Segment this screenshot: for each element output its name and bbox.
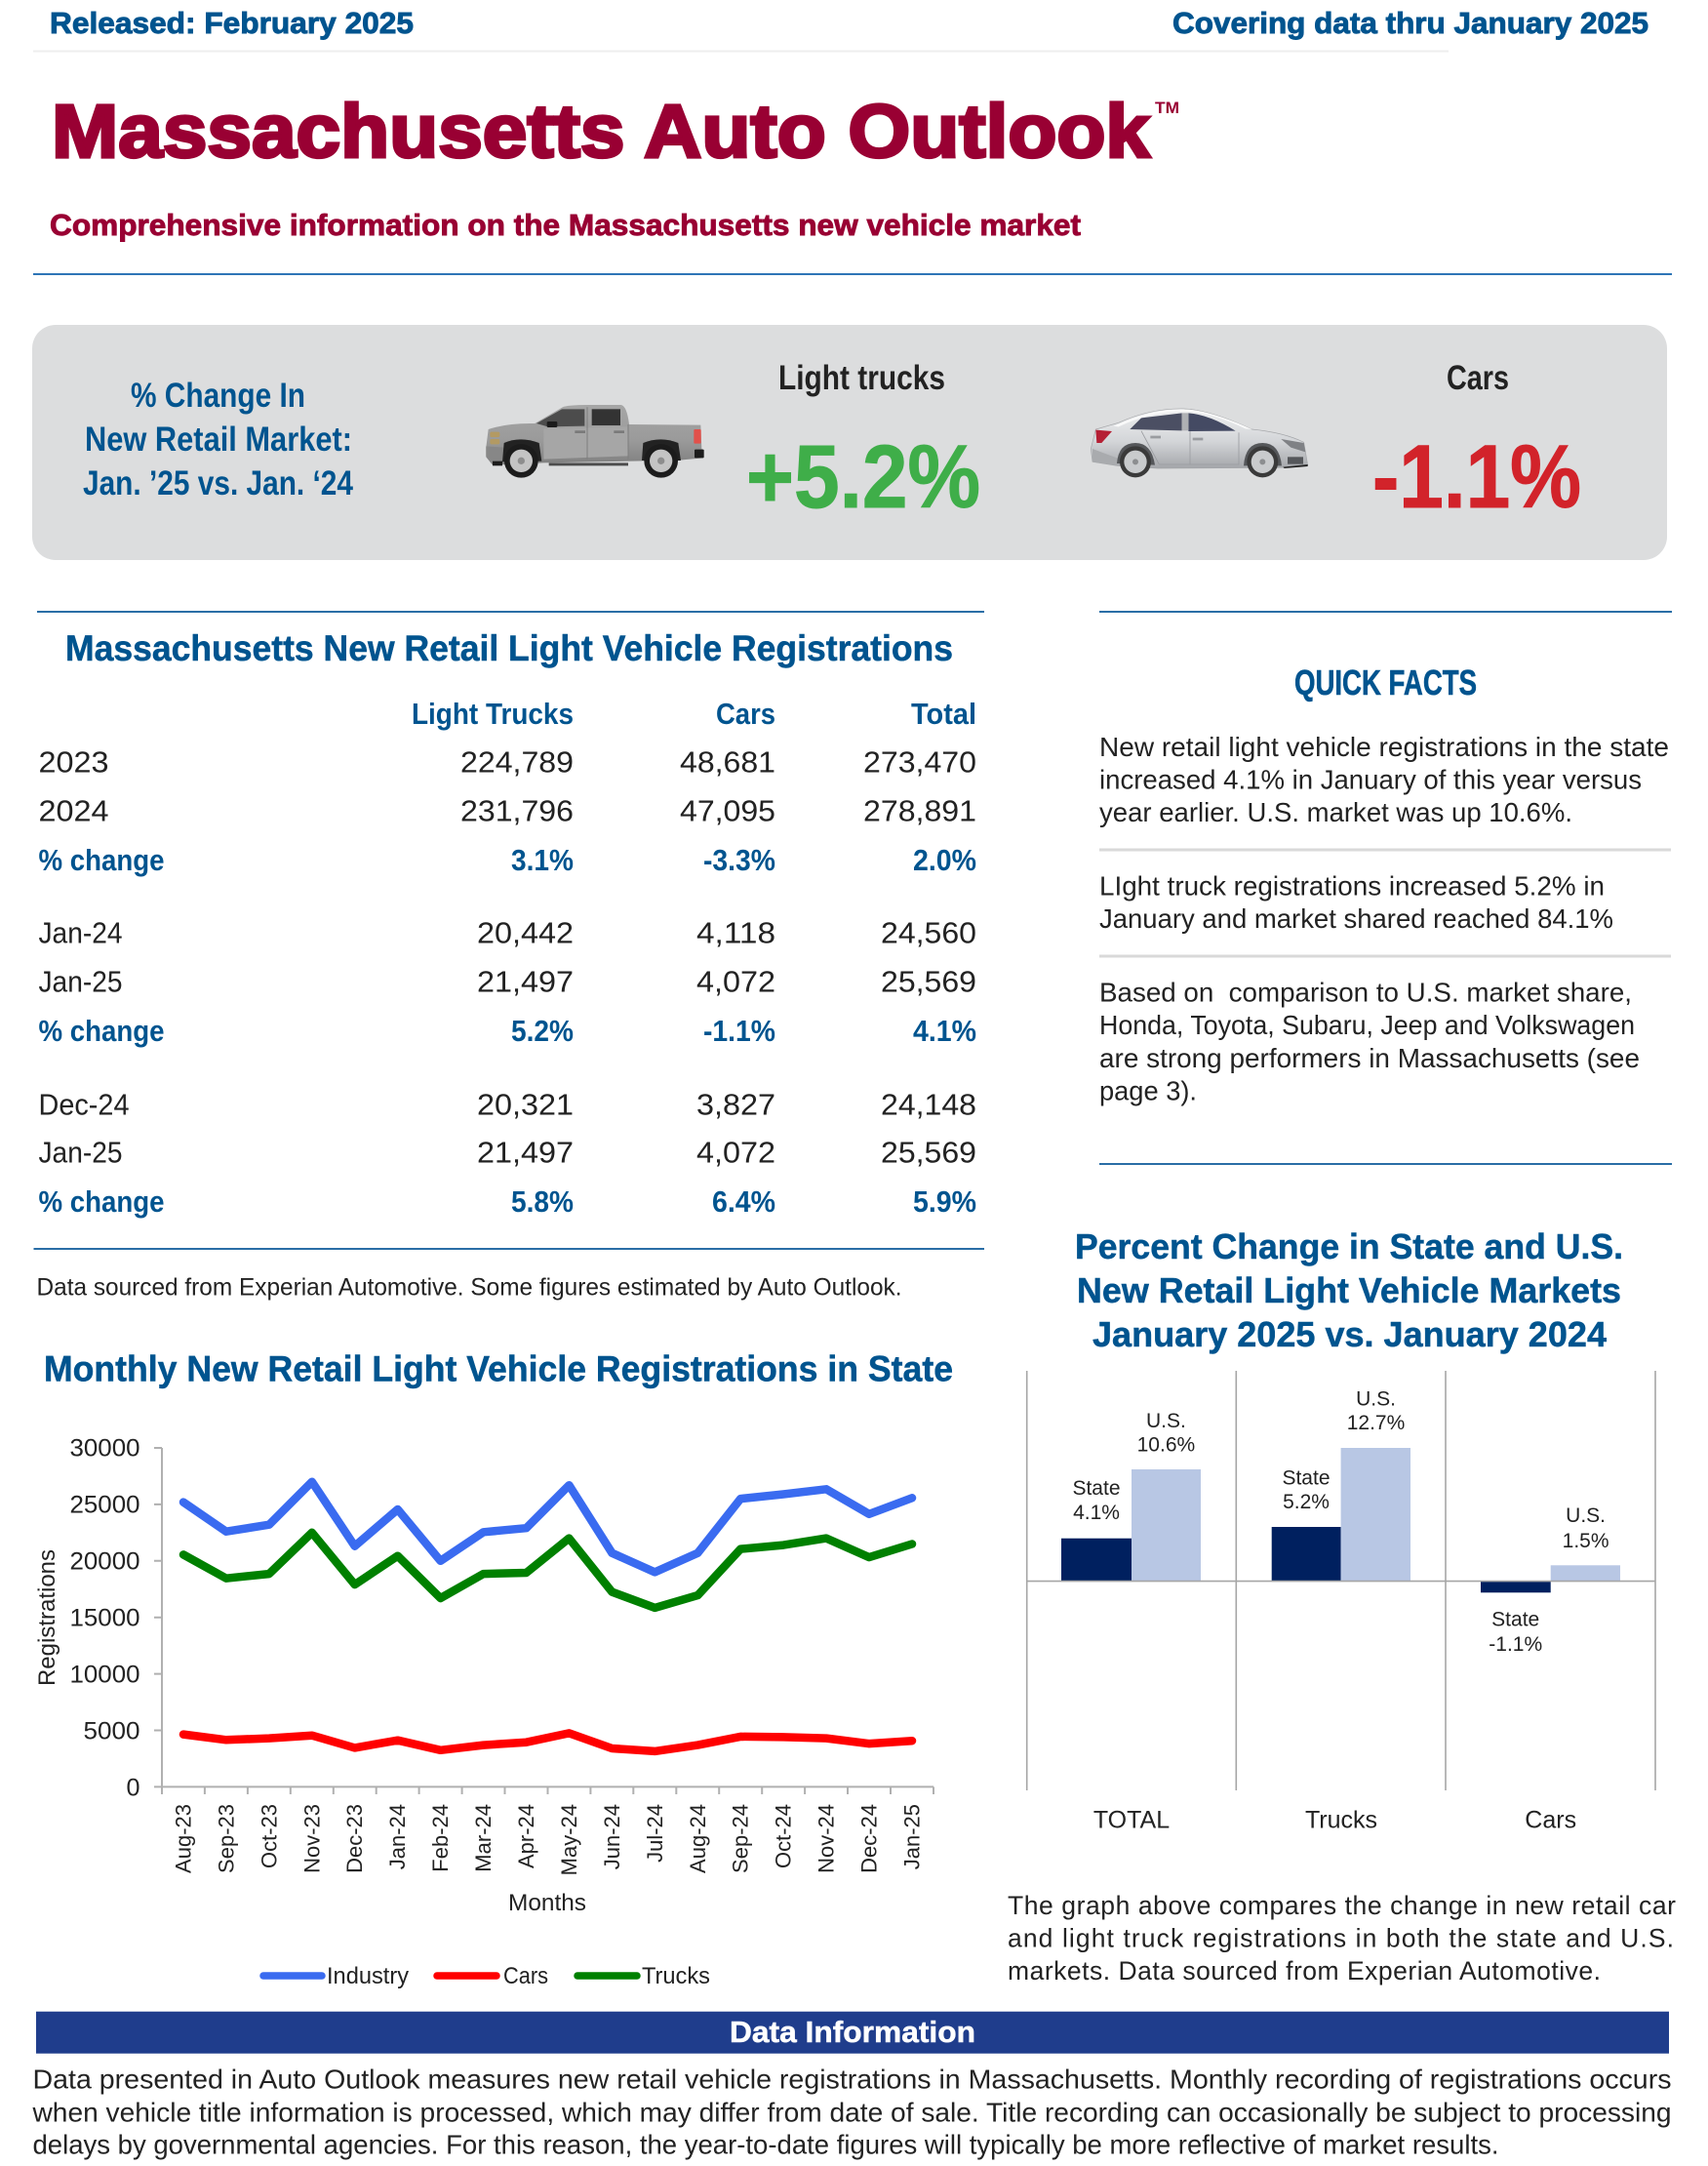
labels: cars: U.S. <box>1566 1504 1606 1527</box>
fact 3: Honda, Toyota, Subaru, Jeep and Volkswagen <box>1099 1010 1635 1040</box>
row: percent change annual: % change <box>39 843 164 877</box>
row: 2023: 273,470 <box>863 745 976 779</box>
bar chart description: The graph above compares the change in new retail car <box>1008 1891 1676 1920</box>
row: Jan-25: Jan-25 <box>39 964 123 999</box>
data information text: Data presented in Auto Outlook measures new retail vehicle registrations in Massachusetts. Monthly recording of registrations occurs <box>33 2065 1672 2095</box>
line chart: monthly registrations <box>34 1434 933 1989</box>
icon: pickup truck <box>486 405 704 478</box>
table title: Massachusetts New Retail Light Vehicle Registrations <box>65 628 953 668</box>
row: percent change January: 4.1% <box>913 1014 976 1048</box>
panel heading <box>83 377 353 502</box>
labels: total: U.S. <box>1146 1410 1186 1432</box>
panel heading: % Change In <box>131 377 305 415</box>
panel: percent change summary <box>32 325 1667 560</box>
fact 3: Based on comparison to U.S. market share, <box>1099 978 1632 1007</box>
bar chart heading <box>1075 1226 1623 1354</box>
data information text: delays by governmental agencies. For this reason, the year-to-date figures will typically be more reflective of market results. <box>33 2130 1498 2160</box>
row: percent change January <box>39 1014 976 1048</box>
row: percent change monthly <box>39 1184 976 1219</box>
row: Dec-24: 20,321 <box>477 1087 574 1122</box>
row: 2024: 278,891 <box>863 794 976 827</box>
quick facts heading: QUICK FACTS <box>1294 662 1477 702</box>
data information text <box>31 2065 1671 2160</box>
light trucks stat: +5.2% <box>746 427 980 527</box>
bars: cars <box>1481 1565 1620 1592</box>
line chart heading: Monthly New Retail Light Vehicle Registrations in State <box>44 1348 953 1389</box>
row: 2024: 47,095 <box>680 794 775 827</box>
x axis month labels: Jan-24 <box>385 1804 410 1869</box>
labels: cars: 1.5% <box>1563 1530 1609 1552</box>
x axis month labels: Nov-24 <box>814 1804 839 1873</box>
bar chart description <box>1008 1891 1676 1986</box>
data information text: when vehicle title information is processed, which may differ from date of sale. Title recording can occasionally be subject to processing <box>31 2097 1671 2127</box>
x axis month labels: Oct-23 <box>257 1804 281 1868</box>
labels: cars <box>1489 1504 1609 1656</box>
subtitle: Comprehensive information on the Massachusetts new vehicle market <box>50 208 1081 242</box>
y axis labels: 30000 <box>70 1434 140 1462</box>
labels: cars: -1.1% <box>1489 1633 1542 1656</box>
row: Jan-24: Jan-24 <box>39 915 123 950</box>
header: release date and coverage: Covering data thru January 2025 <box>1172 6 1648 40</box>
column headers: Total <box>911 697 976 731</box>
y axis labels: 20000 <box>70 1547 140 1575</box>
row: percent change annual: 2.0% <box>913 843 976 877</box>
x axis month labels: Jan-25 <box>899 1804 925 1869</box>
row: Dec-24: Dec-24 <box>39 1087 129 1122</box>
x axis month labels: Nov-23 <box>299 1804 324 1873</box>
header: release date and coverage: Released: February 2025 <box>50 6 414 40</box>
icon: sedan car <box>1091 409 1308 477</box>
fact 1: year earlier. U.S. market was up 10.6%. <box>1099 797 1572 827</box>
series: industry <box>183 1482 912 1572</box>
x axis month labels: May-24 <box>557 1804 581 1875</box>
row: percent change January: % change <box>39 1014 164 1048</box>
title: TM <box>1155 99 1179 117</box>
x axis month labels: Feb-24 <box>428 1804 453 1872</box>
y axis title: Registrations <box>34 1549 60 1686</box>
row: Jan-24: 4,118 <box>696 915 775 950</box>
row: percent change annual <box>39 843 976 877</box>
row: Jan-25 second: 4,072 <box>696 1136 775 1169</box>
y axis labels: 25000 <box>70 1491 140 1518</box>
column headers: Light Trucks <box>412 697 574 731</box>
row: Jan-24: 24,560 <box>881 915 976 950</box>
category labels <box>1093 1807 1576 1834</box>
row: percent change monthly: 5.8% <box>511 1184 574 1219</box>
row: percent change monthly: 5.9% <box>913 1184 976 1219</box>
chart grid <box>1027 1371 1655 1790</box>
fact 1 <box>1099 732 1669 827</box>
row: Jan-25: 21,497 <box>477 964 574 999</box>
labels: trucks: 12.7% <box>1347 1412 1405 1434</box>
labels: total: 4.1% <box>1073 1502 1120 1524</box>
panel: quick facts <box>1099 611 1672 1165</box>
y axis labels: 10000 <box>70 1661 140 1688</box>
bar chart description: and light truck registrations in both the state and U.S. <box>1008 1924 1674 1953</box>
y axis labels <box>70 1434 140 1801</box>
row: percent change January: 5.2% <box>511 1014 574 1048</box>
row: 2024: 2024 <box>39 794 109 827</box>
chart legend: Industry <box>327 1963 409 1989</box>
cars stat: Cars <box>1447 359 1509 397</box>
labels: trucks: U.S. <box>1356 1387 1396 1411</box>
bars: trucks <box>1272 1448 1410 1582</box>
bar chart heading: January 2025 vs. January 2024 <box>1092 1314 1607 1354</box>
x axis month labels: Sep-24 <box>729 1804 753 1873</box>
row: Jan-25 second: Jan-25 <box>39 1136 123 1169</box>
row: Jan-25 second: 21,497 <box>477 1136 574 1169</box>
chart legend <box>263 1963 710 1989</box>
category labels: Cars <box>1525 1807 1576 1834</box>
row: percent change annual: -3.3% <box>703 843 775 877</box>
series: trucks <box>183 1533 912 1608</box>
row: percent change annual: 3.1% <box>511 843 574 877</box>
row: percent change monthly: 6.4% <box>712 1184 775 1219</box>
row: Dec-24: 24,148 <box>881 1087 976 1122</box>
x axis month labels: Sep-23 <box>214 1804 238 1873</box>
row: Jan-25: 25,569 <box>881 964 976 999</box>
x axis month labels: Dec-24 <box>856 1804 882 1873</box>
panel heading: New Retail Market: <box>85 421 352 459</box>
labels: total: 10.6% <box>1137 1434 1195 1456</box>
fact 2: January and market shared reached 84.1% <box>1099 903 1613 934</box>
data information banner: Data Information <box>730 2015 975 2049</box>
row: Jan-25 second: 25,569 <box>881 1136 976 1169</box>
row: Jan-24: 20,442 <box>477 915 574 950</box>
x axis month labels: Jun-24 <box>600 1804 624 1869</box>
labels: trucks: 5.2% <box>1283 1491 1330 1513</box>
cars stat: -1.1% <box>1372 427 1581 527</box>
row: 2023 <box>39 745 976 779</box>
table source note: Data sourced from Experian Automotive. Some figures estimated by Auto Outlook. <box>37 1274 901 1302</box>
row: 2024: 231,796 <box>460 794 574 827</box>
x axis month labels: Mar-24 <box>471 1804 496 1872</box>
fact 3: page 3). <box>1099 1076 1197 1106</box>
chart legend: Cars <box>503 1963 548 1989</box>
fact 2: LIght truck registrations increased 5.2% in <box>1099 870 1605 902</box>
series: cars <box>183 1733 912 1751</box>
header: release date and coverage <box>50 6 1648 40</box>
row: Dec-24: 3,827 <box>696 1087 775 1122</box>
row: percent change January: -1.1% <box>703 1014 775 1048</box>
fact 2 <box>1099 870 1613 934</box>
x axis month labels: Jul-24 <box>643 1804 667 1863</box>
row: Jan-25 second <box>39 1136 976 1169</box>
row: 2023: 48,681 <box>680 745 775 779</box>
fact 1: increased 4.1% in January of this year versus <box>1099 765 1642 794</box>
x axis month labels: Aug-24 <box>686 1804 710 1873</box>
bar chart heading: Percent Change in State and U.S. <box>1075 1226 1623 1266</box>
data information banner <box>36 2012 1669 2054</box>
row: 2023: 224,789 <box>460 745 574 779</box>
chart legend: Trucks <box>642 1963 710 1989</box>
x axis month labels: Apr-24 <box>514 1804 538 1868</box>
title: Massachusetts Auto Outlook <box>52 90 1150 174</box>
bar chart heading: New Retail Light Vehicle Markets <box>1077 1270 1621 1310</box>
labels: total: State <box>1072 1477 1121 1500</box>
row: 2024 <box>39 794 976 827</box>
labels: total <box>1072 1410 1195 1524</box>
column headers: Cars <box>716 697 775 731</box>
row: Jan-25: 4,072 <box>696 964 775 999</box>
labels: trucks <box>1282 1387 1405 1513</box>
x axis month labels: Dec-23 <box>342 1804 367 1873</box>
row: 2023: 2023 <box>39 745 109 779</box>
light trucks stat: Light trucks <box>778 359 945 397</box>
x axis month labels: Oct-24 <box>772 1804 796 1868</box>
cars stat <box>1372 359 1581 527</box>
chart axes <box>154 1448 933 1794</box>
labels: trucks: State <box>1282 1467 1331 1490</box>
y axis labels: 0 <box>127 1774 140 1801</box>
y axis labels: 5000 <box>84 1717 140 1745</box>
row: Jan-24 <box>39 915 976 950</box>
bars: total <box>1061 1469 1201 1582</box>
labels: cars: State <box>1491 1608 1539 1631</box>
category labels: Trucks <box>1305 1807 1377 1834</box>
row: Dec-24 <box>39 1087 976 1122</box>
x axis month labels: Aug-23 <box>172 1804 195 1873</box>
light trucks stat <box>746 359 980 527</box>
category labels: TOTAL <box>1093 1807 1170 1834</box>
x axis title: Months <box>508 1890 586 1916</box>
column headers <box>412 697 976 731</box>
bar chart: state vs U.S. <box>1027 1371 1655 1834</box>
row: percent change monthly: % change <box>39 1184 164 1219</box>
table: registrations <box>33 611 984 1250</box>
panel heading: Jan. ’25 vs. Jan. ‘24 <box>83 464 353 502</box>
x axis month labels <box>172 1804 925 1875</box>
fact 3 <box>1099 978 1640 1106</box>
bar chart description: markets. Data sourced from Experian Automotive. <box>1008 1956 1601 1986</box>
y axis labels: 15000 <box>70 1604 140 1631</box>
fact 1: New retail light vehicle registrations in the state <box>1099 732 1669 762</box>
row: Jan-25 <box>39 964 976 999</box>
fact 3: are strong performers in Massachusetts (see <box>1099 1043 1640 1073</box>
